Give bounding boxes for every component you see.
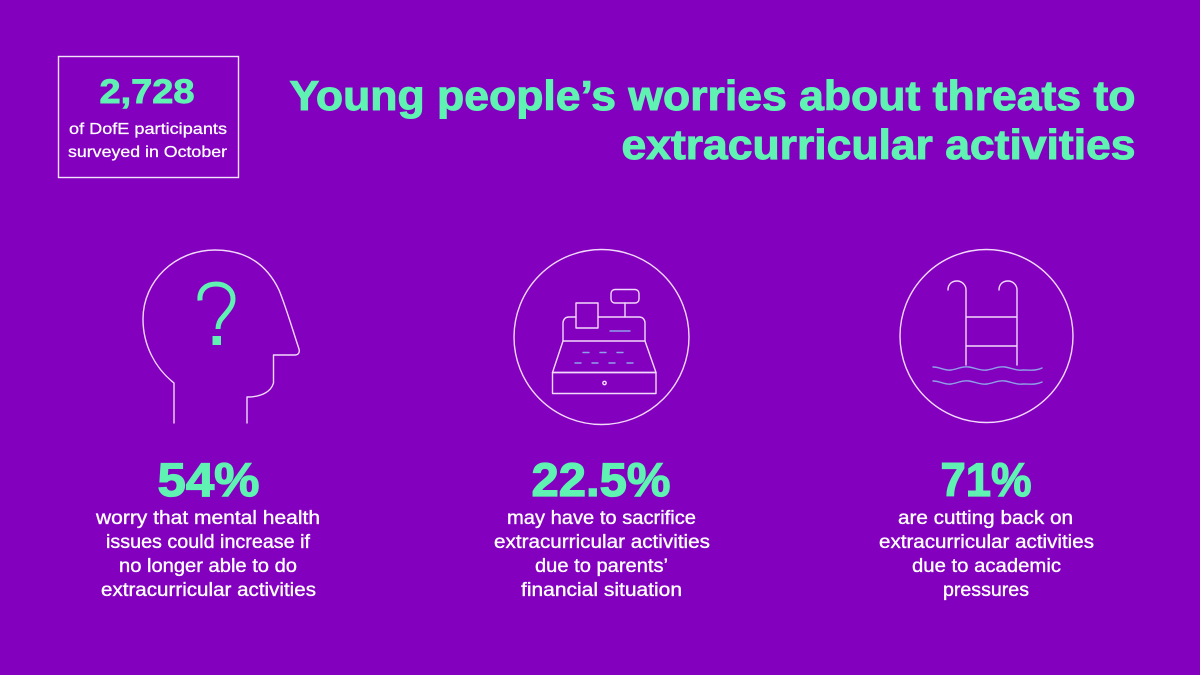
title: Young people’s worries about threats to (290, 72, 1136, 119)
text: finances description: due to parents’ (535, 555, 668, 577)
text: academic pressures description: due to academic (912, 555, 1061, 577)
panel: mental health (95, 250, 320, 601)
text: mental health description: no longer able to do (119, 555, 297, 577)
panel: academic pressures (879, 250, 1094, 601)
text: finances description: financial situation (521, 579, 682, 601)
callout: survey size: 2,728 (100, 73, 194, 111)
icon: cash register in circle (514, 250, 689, 424)
callout: survey size: surveyed in October (68, 144, 228, 161)
text: finances description: extracurricular activities (494, 531, 710, 553)
statistic: 22.5%: 22.5% (532, 453, 670, 506)
text: mental health description: worry that mental health (95, 507, 320, 529)
text: mental health description: extracurricular activities (101, 579, 316, 601)
text: academic pressures description: extracurricular activities (879, 531, 1094, 553)
statistic: 71%: 71% (940, 453, 1032, 506)
text: academic pressures description: are cutting back on (898, 507, 1073, 529)
title (290, 72, 1136, 168)
icon: head with question mark (143, 250, 299, 423)
title: extracurricular activities (622, 121, 1136, 168)
callout: survey size (58, 56, 238, 178)
panel: finances (494, 250, 710, 601)
statistic: 54%: 54% (158, 453, 260, 506)
text: finances description (494, 507, 710, 601)
text: finances description: may have to sacrifice (507, 507, 696, 529)
text: mental health description (95, 507, 320, 601)
text: academic pressures description (879, 507, 1094, 601)
text: mental health description: issues could increase if (106, 531, 311, 553)
icon: pool ladder in circle (900, 250, 1073, 422)
callout: survey size: of DofE participants (69, 121, 227, 138)
text: academic pressures description: pressures (943, 579, 1029, 601)
